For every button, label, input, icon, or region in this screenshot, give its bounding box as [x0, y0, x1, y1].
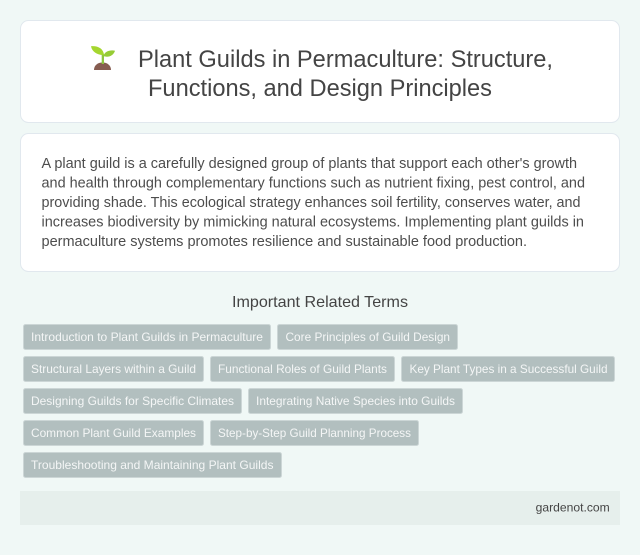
tag [402, 356, 614, 382]
panel: title card [20, 20, 620, 122]
tag [210, 356, 394, 382]
tag [24, 388, 242, 414]
text block: description: providing shade. This ecological strategy enhances soil fertility, conserves water, and [42, 195, 580, 211]
heading: related terms: Important Related Terms [232, 294, 408, 311]
footer [20, 491, 620, 525]
tag list: related terms [24, 324, 614, 478]
footer: gardenot.com [536, 501, 610, 515]
text block: description: A plant guild is a carefully designed group of plants that support each other's growth [42, 156, 577, 172]
tag: Structural Layers within a Guild [31, 362, 196, 376]
tag: Core Principles of Guild Design [286, 330, 450, 344]
tag: Integrating Native Species into Guilds [256, 394, 455, 408]
tag: Designing Guilds for Specific Climates [31, 394, 234, 408]
title: Functions, and Design Principles [148, 75, 492, 102]
tag: Step-by-Step Guild Planning Process [218, 426, 411, 440]
text block: description: increases biodiversity by mimicking natural ecosystems. Implementing plant guilds in [42, 215, 584, 231]
tag [24, 420, 204, 446]
title: Plant Guilds in Permaculture: Structure, [138, 46, 553, 73]
tag [24, 452, 282, 478]
tag [24, 356, 204, 382]
tag [210, 420, 418, 446]
tag [278, 324, 458, 350]
panel: description [20, 134, 620, 272]
title [138, 46, 553, 102]
tag: Functional Roles of Guild Plants [218, 362, 387, 376]
tag: Key Plant Types in a Successful Guild [410, 362, 608, 376]
text block: description: permaculture systems promotes resilience and sustainable food production. [42, 234, 527, 250]
tag: Common Plant Guild Examples [31, 426, 196, 440]
icon: sprout [91, 46, 115, 70]
tag [24, 324, 270, 350]
text block: description [42, 156, 585, 250]
tag [248, 388, 462, 414]
text block: description: and health through complementary functions such as nutrient fixing, pest control, and [42, 176, 585, 192]
tag: Introduction to Plant Guilds in Permaculture [31, 330, 263, 344]
tag: Troubleshooting and Maintaining Plant Guilds [31, 458, 274, 472]
